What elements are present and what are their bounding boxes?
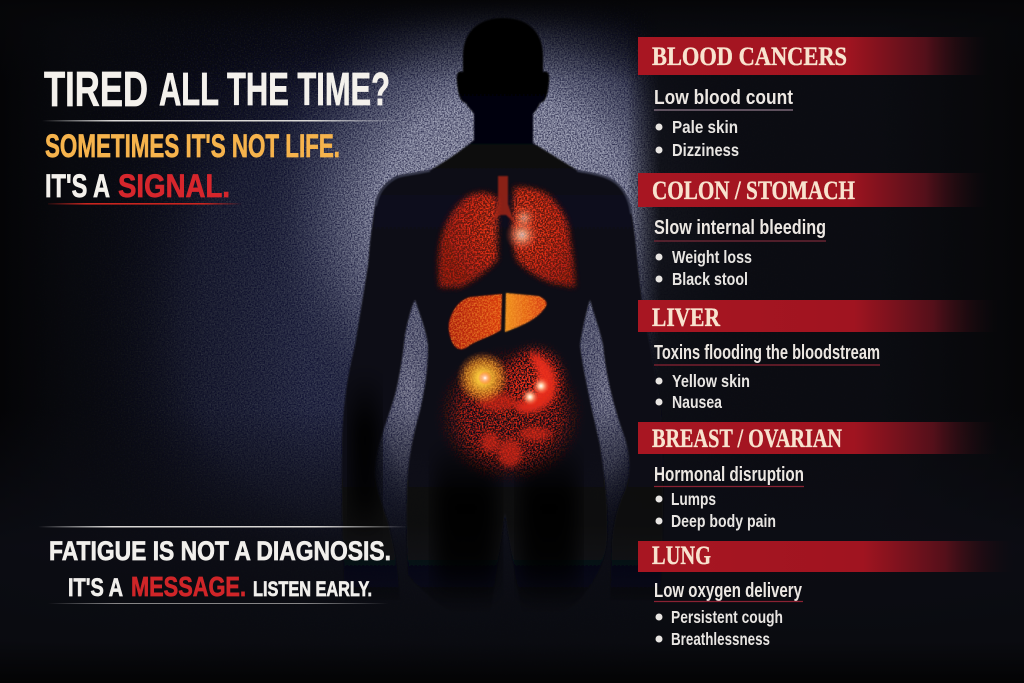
panel: blood cancers <box>638 37 988 160</box>
trachea <box>492 176 514 222</box>
left arm shadow <box>350 370 380 540</box>
panel: breast / ovarian: BREAST / OVARIAN <box>652 424 842 453</box>
panel: blood cancers: Dizziness <box>672 140 739 160</box>
panel: blood cancers: Pale skin <box>672 117 738 137</box>
right leg shadow <box>520 440 578 605</box>
panel: breast / ovarian: Lumps <box>671 489 716 509</box>
message line: MESSAGE. <box>131 571 246 602</box>
bowel loops <box>478 393 551 467</box>
panel: colon / stomach: COLON / STOMACH <box>652 176 855 205</box>
panel: lung: Breathlessness <box>671 629 770 649</box>
message line: LISTEN EARLY. <box>253 578 372 601</box>
white spot two <box>532 377 550 395</box>
panel: lung: LUNG <box>652 541 711 570</box>
liver right lobe <box>505 293 547 332</box>
white spot three <box>521 388 539 406</box>
panel: blood cancers: BLOOD CANCERS <box>652 42 847 71</box>
right lung speckle <box>513 187 575 287</box>
panel: liver: LIVER <box>652 303 720 332</box>
signal line: IT'S A <box>45 168 110 204</box>
liver speckle <box>448 293 546 350</box>
message line: IT'S A <box>68 574 123 602</box>
stomach red arc <box>513 352 556 413</box>
lung glow <box>505 218 539 252</box>
signal line: SIGNAL. <box>118 168 230 204</box>
panel: breast / ovarian: Deep body pain <box>671 511 776 531</box>
panel: liver: Yellow skin <box>672 371 750 391</box>
panel: lung: Low oxygen delivery <box>654 580 803 602</box>
liver left lobe <box>449 294 502 349</box>
shoulder rim light <box>376 171 631 214</box>
lower abdomen speckle <box>436 347 584 483</box>
panel: blood cancers: Low blood count <box>654 87 793 109</box>
yellow hot spot <box>456 351 510 405</box>
panel: liver: Nausea <box>672 392 722 412</box>
yellow hot spot speckle <box>461 356 505 400</box>
stomach speckle <box>501 342 569 418</box>
panel: lung <box>638 541 1013 649</box>
headline block <box>42 63 400 205</box>
panel: liver <box>638 300 998 412</box>
left lung base <box>439 193 498 287</box>
panel: colon / stomach: Slow internal bleeding <box>654 217 826 239</box>
title: ALL THE TIME? <box>159 63 390 115</box>
panel: colon / stomach: Black stool <box>672 269 748 289</box>
human silhouette <box>342 18 663 615</box>
panel: liver: Toxins flooding the bloodstream <box>654 342 880 364</box>
white spot one <box>478 371 492 385</box>
title: TIRED <box>44 63 148 117</box>
panel: colon / stomach <box>638 173 988 289</box>
left leg shadow <box>435 440 497 605</box>
organs <box>436 176 584 483</box>
closing message <box>38 526 408 604</box>
subtitle: SOMETIMES IT'S NOT LIFE. <box>45 128 340 164</box>
panel: breast / ovarian: Hormonal disruption <box>654 464 804 486</box>
right lung base <box>513 187 575 287</box>
fatigue statement: FATIGUE IS NOT A DIAGNOSIS. <box>49 536 391 566</box>
panel: lung: Persistent cough <box>671 607 783 627</box>
panel: breast / ovarian <box>638 422 998 531</box>
panel: colon / stomach: Weight loss <box>672 247 752 267</box>
upper lung glow <box>511 205 537 231</box>
left lung speckle <box>439 193 498 287</box>
